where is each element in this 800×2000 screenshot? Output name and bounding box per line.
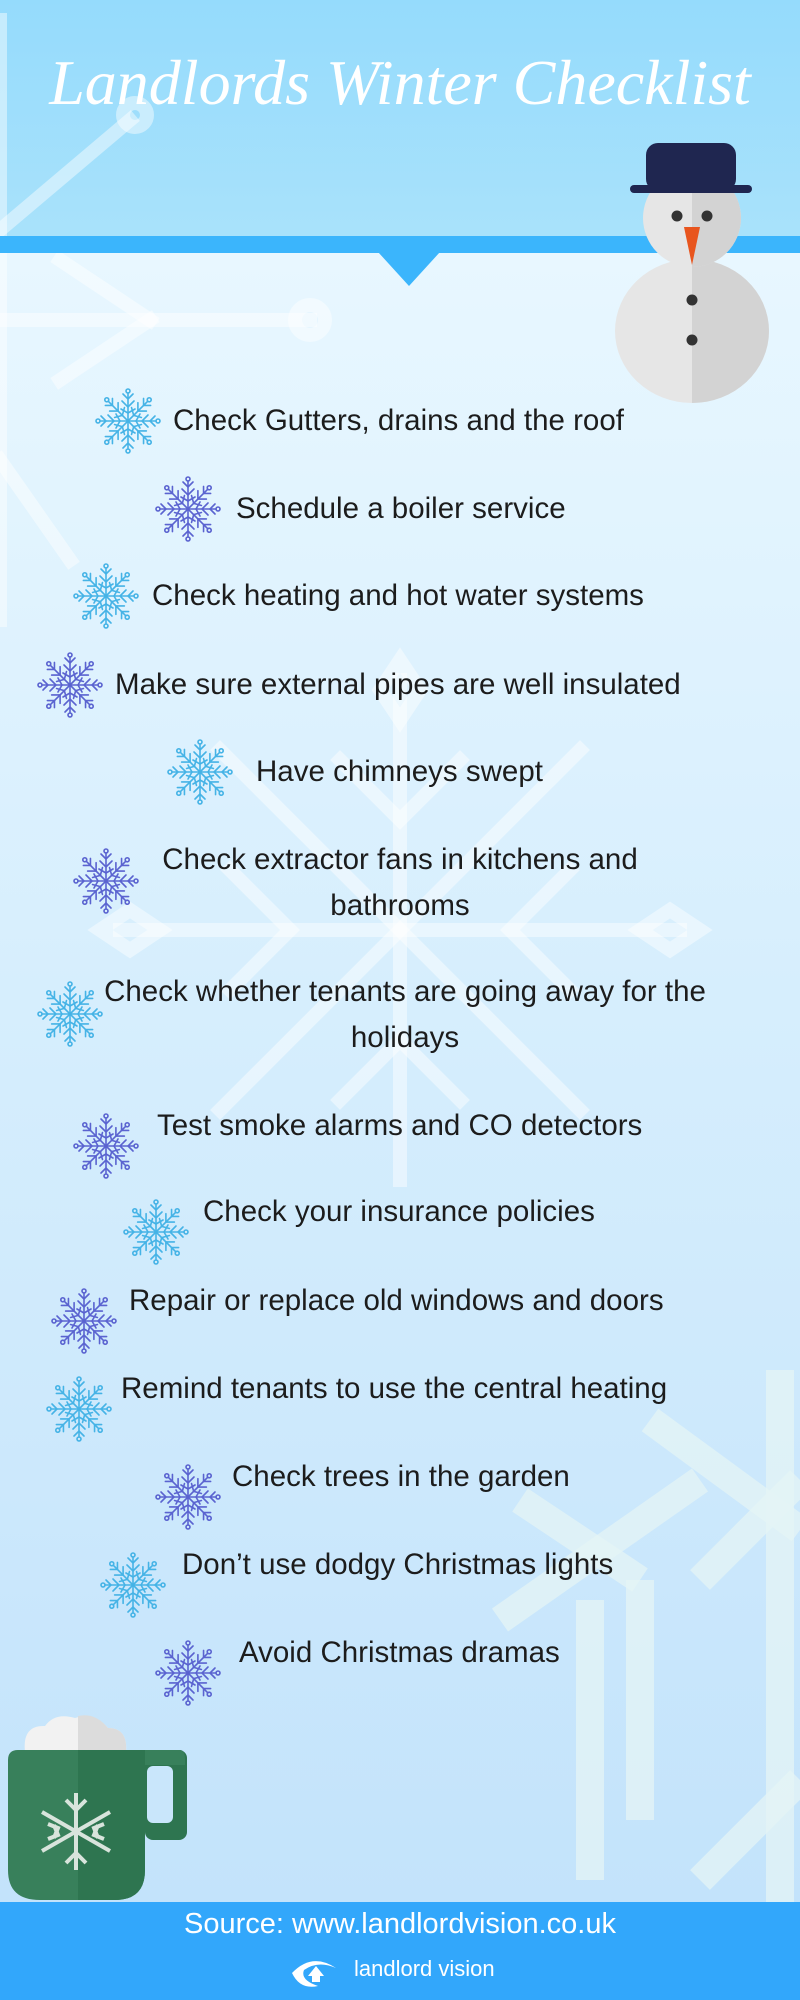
item 1: Check Gutters, drains and the roof: [173, 404, 624, 437]
icon: snowflake 8: [73, 1113, 139, 1179]
icon: snowflake 6: [73, 848, 139, 914]
item 12: Check trees in the garden: [232, 1460, 570, 1493]
item 4: Make sure external pipes are well insulated: [115, 668, 681, 701]
snowman: [615, 143, 769, 403]
title: Landlords Winter Checklist: [49, 47, 751, 118]
icon: snowflake 13: [100, 1552, 166, 1618]
icon: snowflake 9: [123, 1199, 189, 1265]
icon: snowflake 2: [155, 476, 221, 542]
item 13: Don’t use dodgy Christmas lights: [182, 1548, 613, 1581]
item 5: Have chimneys swept: [256, 755, 543, 788]
logo: landlord vision: [354, 1956, 495, 1981]
icon: snowflake 4: [37, 652, 103, 718]
item 14: Avoid Christmas dramas: [239, 1636, 560, 1669]
icon: snowflake 14: [155, 1640, 221, 1706]
item 6: Check extractor fans in kitchens and bathrooms: [162, 843, 638, 922]
item 8: Test smoke alarms and CO detectors: [157, 1109, 642, 1142]
logo: [292, 1956, 495, 1987]
icon: snowflake 10: [51, 1288, 117, 1354]
checklist: [37, 388, 706, 1706]
icon: snowflake 7: [37, 981, 103, 1047]
icon: snowflake 12: [155, 1464, 221, 1530]
icon: snowflake 3: [73, 563, 139, 629]
item 7: Check whether tenants are going away for the: [104, 975, 706, 1008]
icon: mug: [8, 1715, 187, 1900]
source text: Source: www.landlordvision.co.uk: [184, 1908, 616, 1940]
item 10: Repair or replace old windows and doors: [129, 1284, 664, 1317]
icon: snowflake 11: [46, 1376, 112, 1442]
header background: [0, 0, 800, 240]
item 9: Check your insurance policies: [203, 1195, 595, 1228]
item 11: Remind tenants to use the central heating: [121, 1372, 667, 1405]
item 7: holidays: [351, 1021, 459, 1054]
icon: snowflake 1: [95, 388, 161, 454]
icon: snowflake 5: [167, 739, 233, 805]
item 7: [104, 975, 706, 1054]
item 3: Check heating and hot water systems: [152, 579, 644, 612]
footer: [0, 1902, 800, 2000]
header stripe with pointer: [0, 236, 800, 286]
item 2: Schedule a boiler service: [236, 492, 566, 525]
